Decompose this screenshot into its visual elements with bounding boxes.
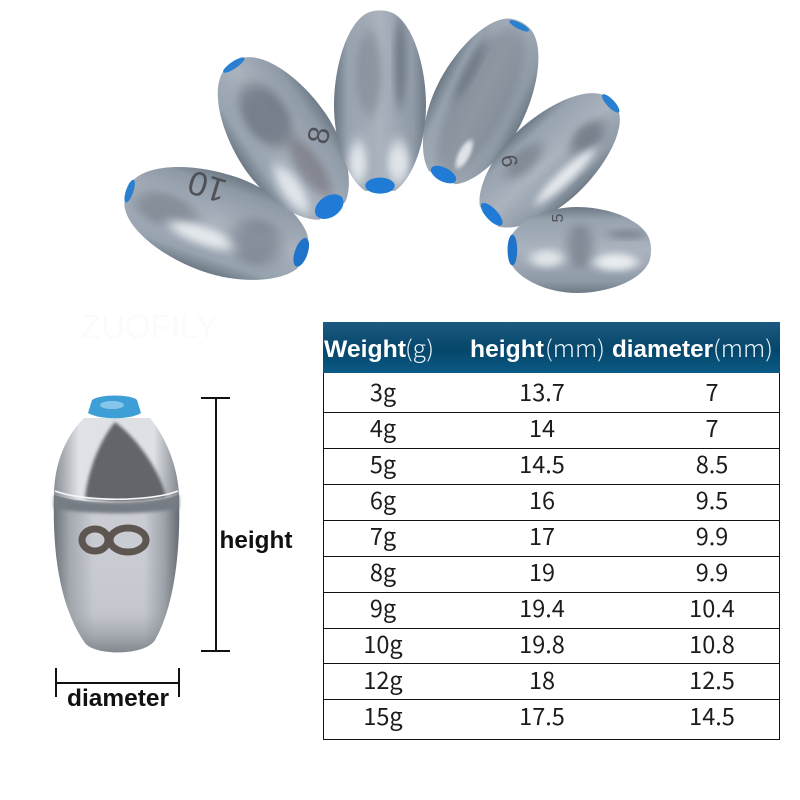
row 15g: 17.5	[519, 698, 565, 732]
table header: (mm)	[545, 330, 605, 364]
row 8g: 19	[529, 554, 555, 588]
photo: six bullet sinkers with blue inserts	[109, 1, 651, 302]
row 4g: 7	[705, 410, 719, 444]
row 8g	[370, 554, 728, 588]
table header: (mm)	[713, 330, 773, 364]
row 12g	[363, 662, 735, 696]
row 12g: 18	[529, 662, 555, 696]
row 6g: 9.5	[696, 482, 728, 516]
row 7g: 17	[529, 518, 555, 552]
sinker marked 10	[124, 167, 310, 280]
height label: height	[220, 527, 292, 554]
row 5g: 8.5	[696, 446, 728, 480]
row 5g: 14.5	[519, 446, 565, 480]
diameter dimension line	[56, 668, 179, 697]
sinker three	[334, 10, 426, 194]
row 15g: 15g	[363, 698, 403, 732]
table header: height	[470, 336, 544, 363]
infinity mark	[82, 528, 146, 552]
row 12g: 12.5	[689, 662, 735, 696]
sinker marked 5	[508, 207, 651, 293]
row 15g	[363, 698, 735, 732]
photo: single sinker with dimensions	[54, 396, 179, 652]
table header: Weight	[324, 336, 406, 363]
diameter label: diameter	[67, 685, 169, 712]
row 15g: 14.5	[689, 698, 735, 732]
table header: (g)	[405, 330, 434, 364]
row 8g: 8g	[370, 554, 396, 588]
row 9g: 10.4	[689, 590, 735, 624]
table: weight, height and diameter sizes	[323, 322, 780, 740]
size markings on sinkers	[184, 124, 567, 222]
row 10g: 10.8	[689, 626, 735, 660]
size markings on sinkers: 9	[496, 153, 523, 169]
row 4g: 4g	[370, 410, 396, 444]
row 4g: 14	[529, 410, 555, 444]
sinker marked 8	[218, 57, 349, 220]
row 6g	[370, 482, 728, 516]
row 5g	[370, 446, 728, 480]
row 8g: 9.9	[696, 554, 728, 588]
blue insert	[88, 396, 141, 418]
row 6g: 16	[529, 482, 555, 516]
size markings on sinkers: 5	[550, 213, 567, 222]
row 7g: 9.9	[696, 518, 728, 552]
row 4g	[370, 410, 719, 444]
row 6g: 6g	[370, 482, 396, 516]
row 9g	[370, 590, 735, 624]
sinker four	[422, 18, 538, 184]
row 10g: 19.8	[519, 626, 565, 660]
row 7g: 7g	[370, 518, 396, 552]
watermark: ZUOFILY	[81, 308, 218, 345]
row 3g: 13.7	[519, 374, 565, 408]
row 3g: 3g	[370, 374, 396, 408]
row 9g: 9g	[370, 590, 396, 624]
row 12g: 12g	[363, 662, 403, 696]
sinker marked 9	[480, 93, 620, 228]
row 3g	[370, 374, 719, 408]
size markings on sinkers: 8	[302, 124, 337, 147]
sinker upper body	[54, 418, 179, 502]
row 9g: 19.4	[519, 590, 565, 624]
row 10g	[363, 626, 735, 660]
sinker lower body	[54, 495, 179, 652]
row 10g: 10g	[363, 626, 403, 660]
table grid	[323, 373, 780, 740]
row 7g	[370, 518, 728, 552]
height dimension line	[201, 398, 230, 651]
table header: diameter	[612, 336, 713, 363]
row 5g: 5g	[370, 446, 396, 480]
size markings on sinkers: 10	[184, 162, 231, 210]
table header	[323, 322, 780, 373]
row 3g: 7	[705, 374, 719, 408]
